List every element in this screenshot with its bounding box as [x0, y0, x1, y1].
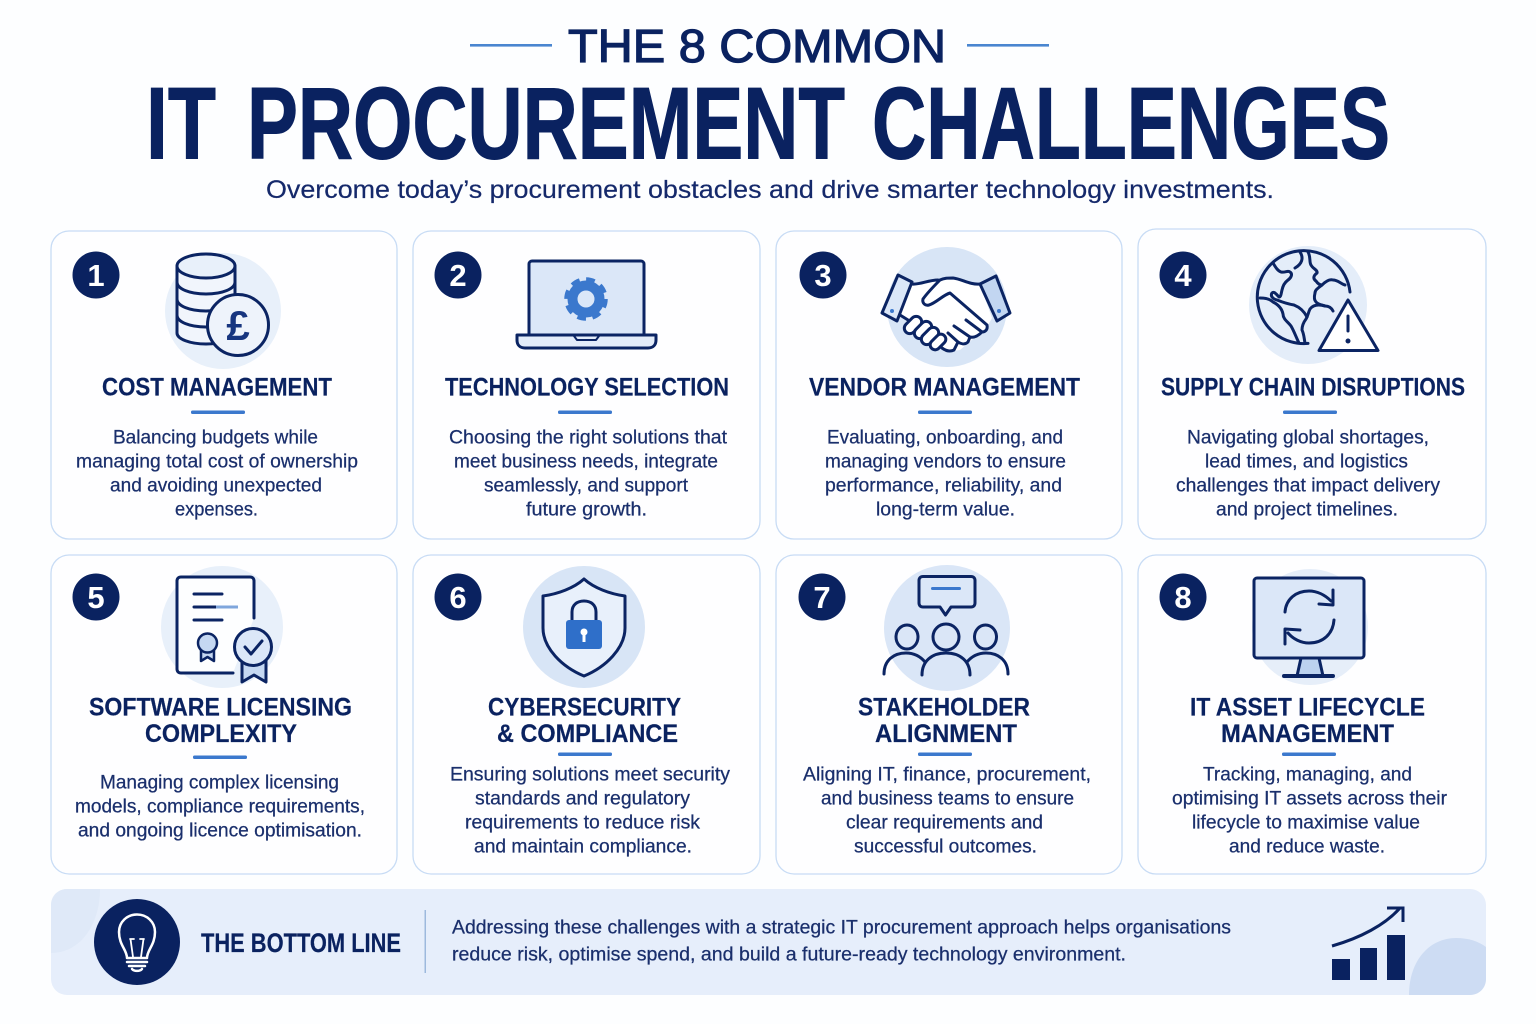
badge 5: 5 — [87, 580, 105, 615]
panel: cybersecurity and compliance — [413, 555, 760, 874]
icon: team with speech bubble — [884, 565, 1010, 691]
description: future growth. — [526, 500, 647, 520]
heading: COMPLEXITY — [145, 720, 297, 748]
icon: growth chart — [1332, 908, 1405, 980]
description: and ongoing licence optimisation. — [78, 820, 362, 842]
icon: monitor with refresh arrows — [1252, 569, 1368, 685]
panel: technology selection — [413, 231, 760, 539]
description: Ensuring solutions meet security — [450, 764, 731, 786]
callout heading: THE BOTTOM LINE — [201, 928, 401, 958]
heading: ALIGNMENT — [875, 720, 1017, 748]
panel: it asset lifecycle management — [1138, 555, 1486, 874]
description — [450, 764, 731, 858]
heading — [858, 694, 1030, 748]
description: managing vendors to ensure — [825, 452, 1066, 472]
description: Choosing the right solutions that — [449, 428, 728, 448]
heading: VENDOR MANAGEMENT — [809, 374, 1080, 402]
description: Evaluating, onboarding, and — [827, 428, 1063, 448]
heading: SUPPLY CHAIN DISRUPTIONS — [1161, 374, 1465, 402]
badge 3 — [800, 252, 846, 298]
description: optimising IT assets across their — [1172, 788, 1448, 810]
callout text — [452, 918, 1231, 966]
heading: & COMPLIANCE — [497, 720, 678, 748]
description — [1172, 764, 1448, 858]
badge 8: 8 — [1174, 580, 1192, 615]
heading — [89, 694, 352, 748]
description: and avoiding unexpected — [110, 476, 322, 496]
badge 2 — [434, 252, 482, 298]
description: clear requirements and — [846, 812, 1043, 834]
badge 4 — [1160, 252, 1206, 298]
heading: STAKEHOLDER — [858, 694, 1030, 722]
subtitle: Overcome today’s procurement obstacles and drive smarter technology investments. — [266, 176, 1274, 204]
heading: IT ASSET LIFECYCLE — [1190, 694, 1425, 722]
badge 8 — [1160, 574, 1206, 620]
badge 1 — [72, 252, 120, 298]
heading: MANAGEMENT — [1221, 720, 1394, 748]
icon: globe with warning — [1249, 246, 1378, 364]
callout text: reduce risk, optimise spend, and build a future-ready technology environment. — [452, 944, 1126, 966]
description: lead times, and logistics — [1205, 452, 1408, 472]
description: and reduce waste. — [1229, 836, 1385, 858]
icon: lightbulb — [94, 899, 180, 985]
icon: licence document with seal — [161, 566, 283, 688]
panel: cost management — [51, 231, 397, 539]
description: and business teams to ensure — [821, 788, 1074, 810]
description: performance, reliability, and — [825, 476, 1062, 496]
main title: IT — [146, 66, 216, 180]
description: Navigating global shortages, — [1187, 428, 1429, 448]
badge 7 — [798, 574, 846, 620]
heading: COST MANAGEMENT — [102, 374, 332, 402]
description: and maintain compliance. — [474, 836, 692, 858]
header: title block — [146, 20, 1390, 204]
badge 6: 6 — [449, 580, 467, 615]
icon: coin stack with pound: £ — [226, 302, 250, 349]
badge 4: 4 — [1174, 258, 1192, 293]
description — [825, 428, 1066, 520]
panel: stakeholder alignment — [776, 555, 1122, 874]
description: successful outcomes. — [854, 836, 1037, 858]
icon: shield with padlock — [523, 566, 645, 688]
heading: SOFTWARE LICENSING — [89, 694, 352, 722]
badge 7: 7 — [813, 580, 831, 615]
description: standards and regulatory — [475, 788, 691, 810]
description: and project timelines. — [1216, 500, 1398, 520]
badge 1: 1 — [87, 258, 105, 293]
badge 5 — [72, 574, 120, 620]
callout text: Addressing these challenges with a strategic IT procurement approach helps organisations — [452, 918, 1231, 938]
badge 6 — [434, 574, 482, 620]
description: Managing complex licensing — [100, 772, 339, 794]
heading — [488, 694, 681, 748]
description: lifecycle to maximise value — [1192, 812, 1420, 834]
description — [803, 764, 1091, 858]
panel: vendor management — [776, 231, 1122, 539]
description: challenges that impact delivery — [1176, 476, 1440, 496]
icon: coin stack with pound — [165, 253, 281, 369]
panel: the bottom line — [51, 889, 1486, 995]
description: models, compliance requirements, — [75, 796, 365, 818]
description: Aligning IT, finance, procurement, — [803, 764, 1091, 786]
description — [449, 428, 728, 520]
heading: CYBERSECURITY — [488, 694, 681, 722]
description — [76, 428, 358, 520]
description: Balancing budgets while — [113, 428, 318, 448]
description: requirements to reduce risk — [465, 812, 700, 834]
description — [1176, 428, 1440, 520]
description: Tracking, managing, and — [1203, 764, 1412, 786]
description: seamlessly, and support — [484, 476, 689, 496]
eyebrow heading: THE 8 COMMON — [568, 20, 946, 72]
icon: laptop with gear — [517, 261, 656, 348]
heading: TECHNOLOGY SELECTION — [445, 374, 729, 402]
icon: handshake — [882, 247, 1010, 367]
badge 3: 3 — [814, 258, 832, 293]
description: expenses. — [175, 500, 258, 520]
description: managing total cost of ownership — [76, 452, 358, 472]
heading — [1190, 694, 1425, 748]
panel: software licensing complexity — [51, 555, 397, 874]
main title — [146, 66, 1390, 180]
description: meet business needs, integrate — [454, 452, 718, 472]
panel: supply chain disruptions — [1138, 229, 1486, 539]
description — [75, 772, 365, 842]
badge 2: 2 — [449, 258, 467, 293]
description: long-term value. — [876, 500, 1015, 520]
main title: PROCUREMENT — [247, 66, 845, 180]
